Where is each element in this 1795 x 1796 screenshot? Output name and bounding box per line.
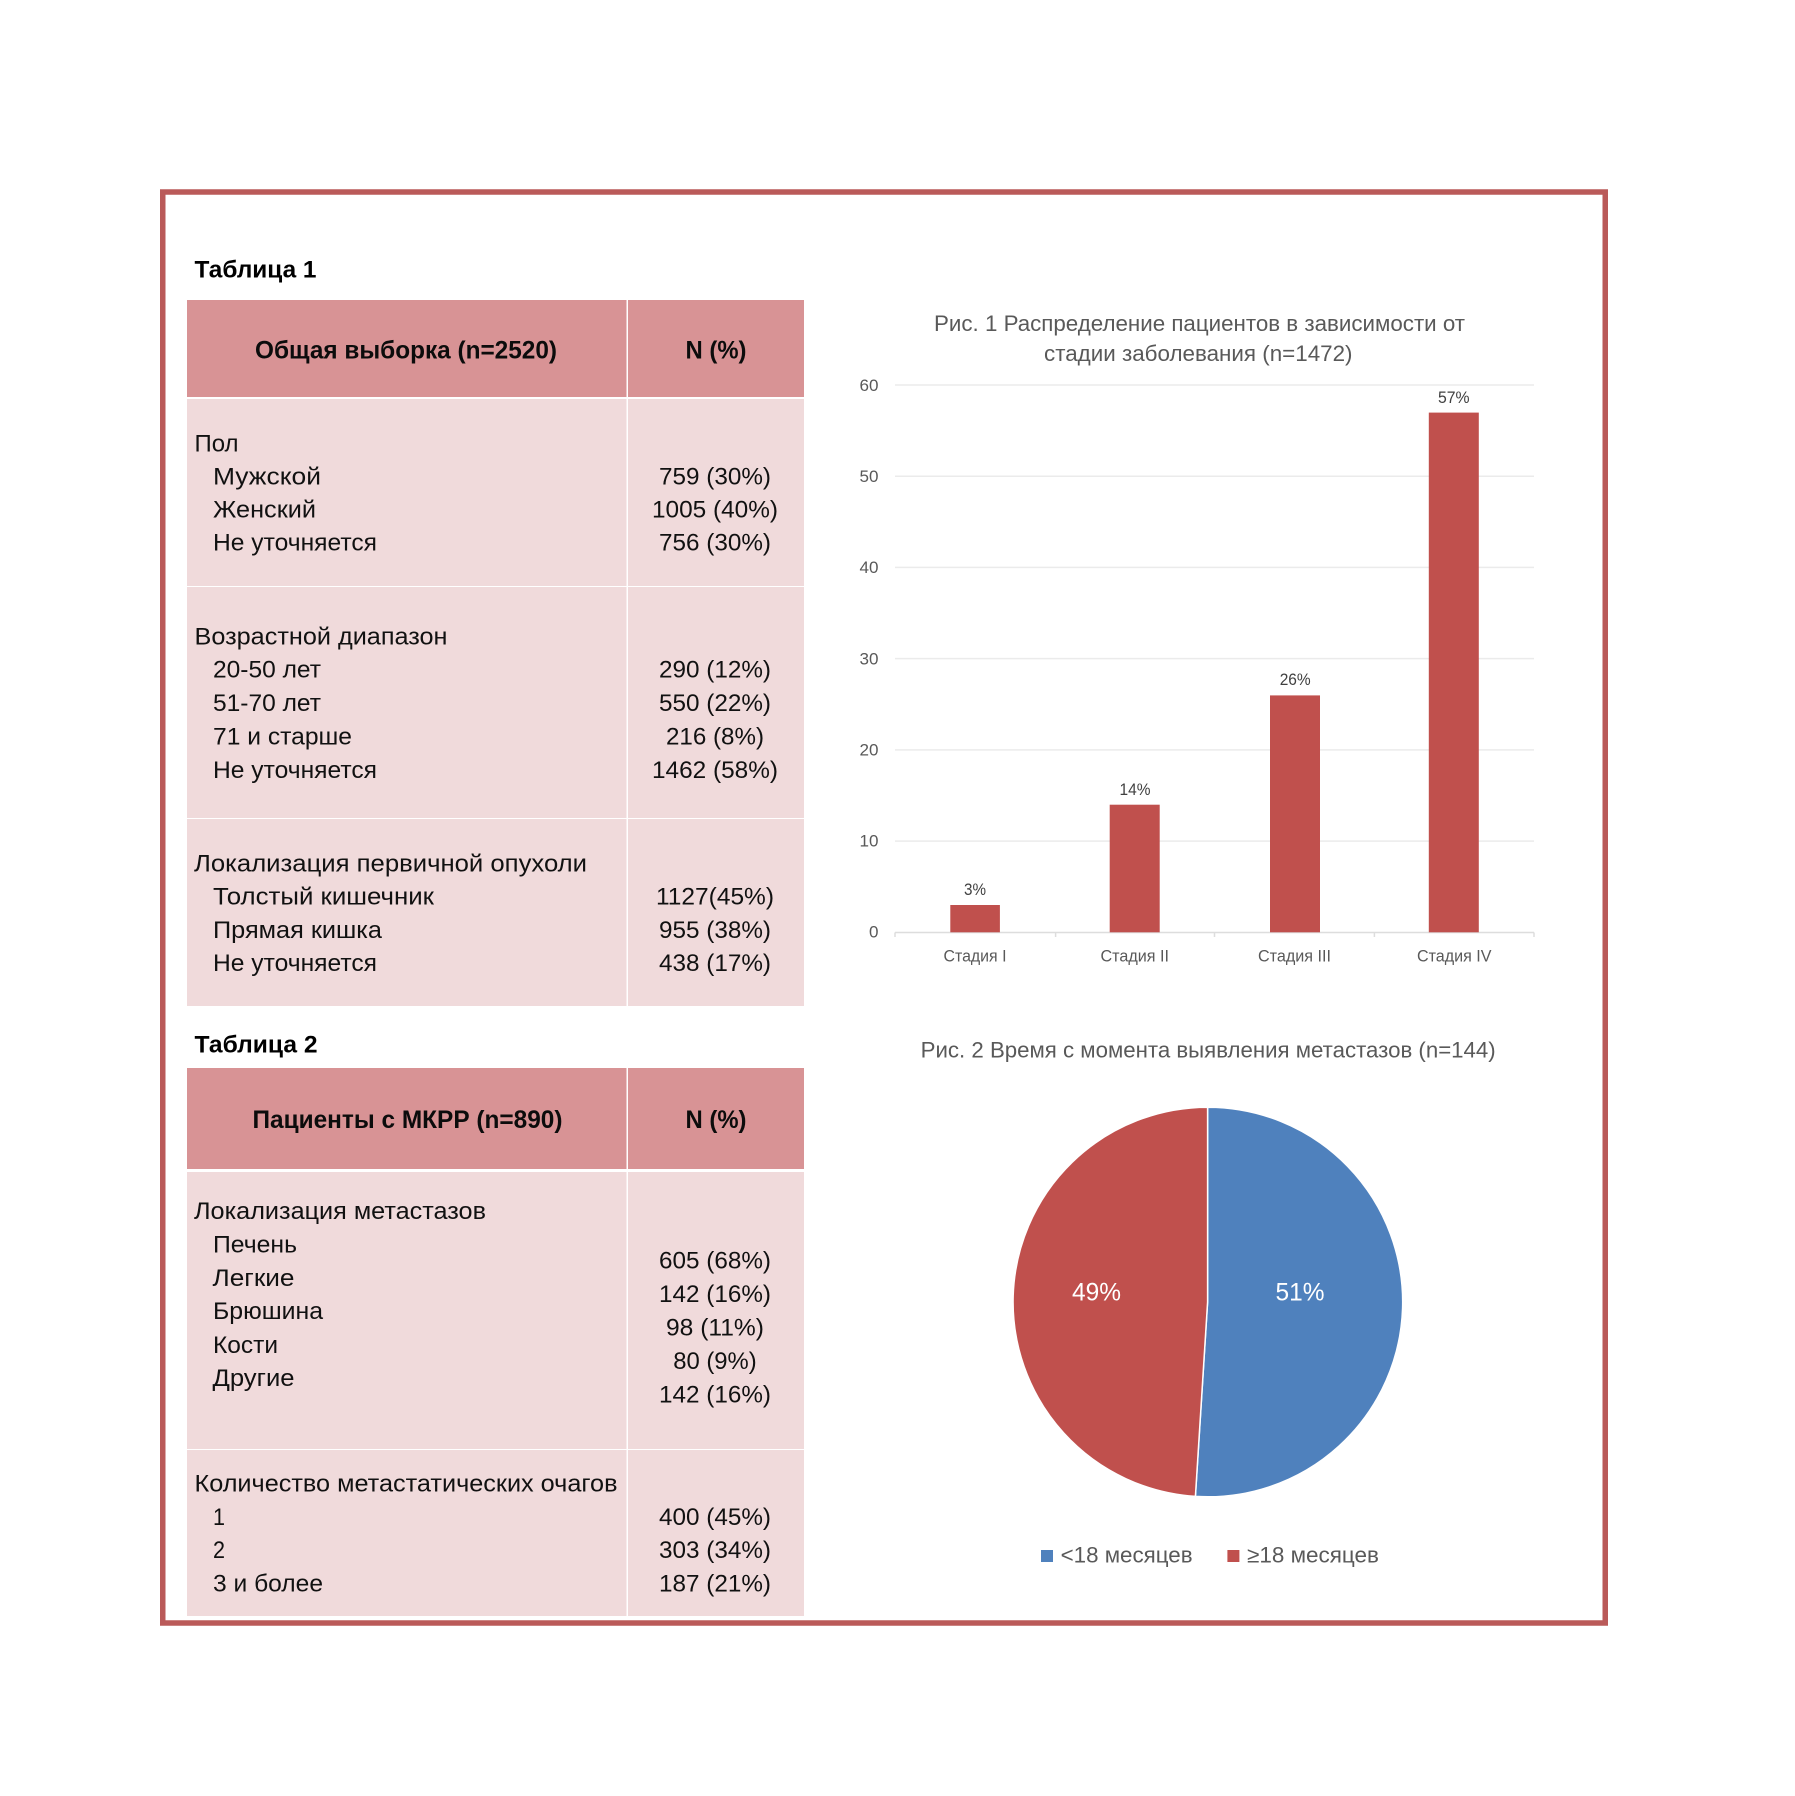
table 1 section: primary tumour location bbox=[187, 819, 804, 1006]
table 1 section: primary tumour location: Прямая кишка bbox=[213, 917, 383, 944]
table 1 section: primary tumour location: 438 (17%) bbox=[659, 950, 771, 977]
table 1 section: sex: Мужской bbox=[213, 464, 321, 490]
y axis labels: 20 bbox=[860, 740, 878, 760]
table 1 section: primary tumour location: 1127(45%) bbox=[656, 884, 774, 911]
heading: table 1: Таблица 1 bbox=[194, 256, 316, 284]
table 1 section: primary tumour location: Локализация первичной опухоли bbox=[194, 850, 587, 878]
bar: stage II: 14% bbox=[1120, 780, 1150, 799]
pie label: 51%: 51% bbox=[1276, 1278, 1324, 1306]
bar: stage I: 3% bbox=[964, 880, 986, 899]
table 2 section: metastasis location: 605 (68%) bbox=[659, 1248, 771, 1274]
table 2 section: number of metastatic foci: Количество метастатических очагов bbox=[194, 1471, 618, 1498]
table 2 section: metastasis location: Печень bbox=[213, 1232, 297, 1258]
table 2 section: number of metastatic foci: 3 и более bbox=[213, 1570, 323, 1598]
table 2 section: metastasis location: Локализация метастазов bbox=[194, 1198, 486, 1225]
legend: ≥18 месяцев bbox=[1247, 1542, 1379, 1567]
table 2 section: metastasis location bbox=[187, 1172, 804, 1449]
table 1 section: sex: 756 (30%) bbox=[659, 530, 771, 556]
table 1 section: primary tumour location: 955 (38%) bbox=[659, 917, 771, 944]
chart title: figure 1: стадии заболевания (n=1472) bbox=[1044, 341, 1352, 366]
table 1 section: primary tumour location: Толстый кишечник bbox=[213, 884, 435, 911]
panel: table 2 bbox=[187, 1068, 804, 1616]
table 1 section: age range: 1462 (58%) bbox=[652, 757, 778, 784]
pie chart: time since metastasis detection bbox=[1013, 1107, 1403, 1497]
table 1 section: sex: 1005 (40%) bbox=[652, 496, 778, 524]
bar: stage III: 26% bbox=[1280, 670, 1311, 689]
table 1 section: age range: Возрастной диапазон bbox=[194, 624, 448, 650]
table 2 header row: Пациенты с МКРР (n=890) bbox=[252, 1106, 562, 1134]
bar: stage I bbox=[944, 880, 1006, 966]
table 2 section: metastasis location: 80 (9%) bbox=[673, 1348, 757, 1375]
table 1 section: age range: 216 (8%) bbox=[666, 724, 764, 750]
pie slice: 18 months or more bbox=[1013, 1107, 1208, 1496]
table 2 section: metastasis location: 142 (16%) bbox=[659, 1281, 771, 1308]
table 1 section: sex bbox=[187, 399, 804, 586]
y axis labels: 40 bbox=[860, 558, 878, 577]
table 1 section: sex: Пол bbox=[194, 430, 238, 457]
y axis labels: 60 bbox=[860, 376, 878, 395]
table 2 section: metastasis location: Кости bbox=[213, 1332, 278, 1359]
pie slice: under 18 months bbox=[1195, 1107, 1403, 1497]
y axis labels: 0 bbox=[869, 923, 878, 942]
chart title: figure 2: Рис. 2 Время с момента выявления метастазов (n=144) bbox=[921, 1038, 1496, 1062]
table 1 header row: Общая выборка (n=2520) bbox=[255, 336, 557, 364]
table 1 section: age range: 290 (12%) bbox=[659, 656, 771, 684]
y axis labels: 30 bbox=[860, 649, 878, 668]
table 1 section: age range: 71 и старше bbox=[213, 724, 352, 750]
table 2 section: metastasis location: Брюшина bbox=[213, 1298, 324, 1325]
chart title: figure 1: Рис. 1 Распределение пациентов в зависимости от bbox=[934, 311, 1465, 336]
table 2 section: number of metastatic foci: 187 (21%) bbox=[659, 1570, 771, 1598]
table 2 section: number of metastatic foci bbox=[187, 1450, 804, 1616]
chart title: figure 1 bbox=[934, 311, 1465, 366]
table 1 section: primary tumour location: Не уточняется bbox=[213, 950, 377, 977]
table 1 header row: N (%) bbox=[686, 336, 746, 364]
bar: stage I: Стадия I bbox=[944, 947, 1006, 966]
table 1 section: age range: 51-70 лет bbox=[213, 690, 321, 717]
table 2 section: metastasis location: Другие bbox=[212, 1365, 294, 1392]
table 1 section: sex: Женский bbox=[213, 496, 316, 524]
table 1 header row bbox=[187, 300, 804, 397]
table 2 section: metastasis location: 98 (11%) bbox=[666, 1314, 764, 1342]
bar: stage II: Стадия II bbox=[1100, 947, 1169, 966]
bar: stage III bbox=[1258, 670, 1331, 966]
table 1 section: sex: Не уточняется bbox=[213, 530, 377, 556]
panel: table 1 bbox=[187, 300, 804, 1006]
table 2 section: metastasis location: 142 (16%) bbox=[659, 1382, 771, 1408]
bar: stage IV bbox=[1417, 388, 1492, 966]
table 1 section: age range: 20-50 лет bbox=[213, 656, 321, 684]
table 2 section: number of metastatic foci: 400 (45%) bbox=[659, 1504, 771, 1531]
y axis labels: 50 bbox=[860, 467, 878, 486]
table 2 header row bbox=[187, 1068, 804, 1169]
bar chart: patients by disease stage bbox=[860, 376, 1534, 966]
table 1 section: sex: 759 (30%) bbox=[659, 464, 771, 490]
pie label: 49%: 49% bbox=[1072, 1278, 1121, 1306]
outer frame bbox=[163, 192, 1605, 1623]
table 1 section: age range: Не уточняется bbox=[213, 757, 377, 784]
legend bbox=[1041, 1542, 1379, 1567]
table 2 section: number of metastatic foci: 2 bbox=[213, 1537, 225, 1564]
y axis labels: 10 bbox=[860, 832, 878, 851]
table 2 section: number of metastatic foci: 1 bbox=[213, 1504, 225, 1531]
bar: stage IV: 57% bbox=[1438, 388, 1470, 407]
table 1 section: age range bbox=[187, 587, 804, 818]
bar: stage II bbox=[1100, 780, 1169, 966]
table 2 section: metastasis location: Легкие bbox=[212, 1265, 294, 1292]
table 1 section: age range: 550 (22%) bbox=[659, 690, 771, 717]
heading: table 2: Таблица 2 bbox=[194, 1032, 318, 1058]
y axis labels bbox=[860, 376, 878, 942]
bar: stage IV: Стадия IV bbox=[1417, 947, 1492, 966]
bar: stage III: Стадия III bbox=[1258, 947, 1331, 966]
legend: <18 месяцев bbox=[1061, 1542, 1193, 1567]
table 2 header row: N (%) bbox=[686, 1106, 746, 1134]
table 2 section: number of metastatic foci: 303 (34%) bbox=[659, 1537, 771, 1564]
